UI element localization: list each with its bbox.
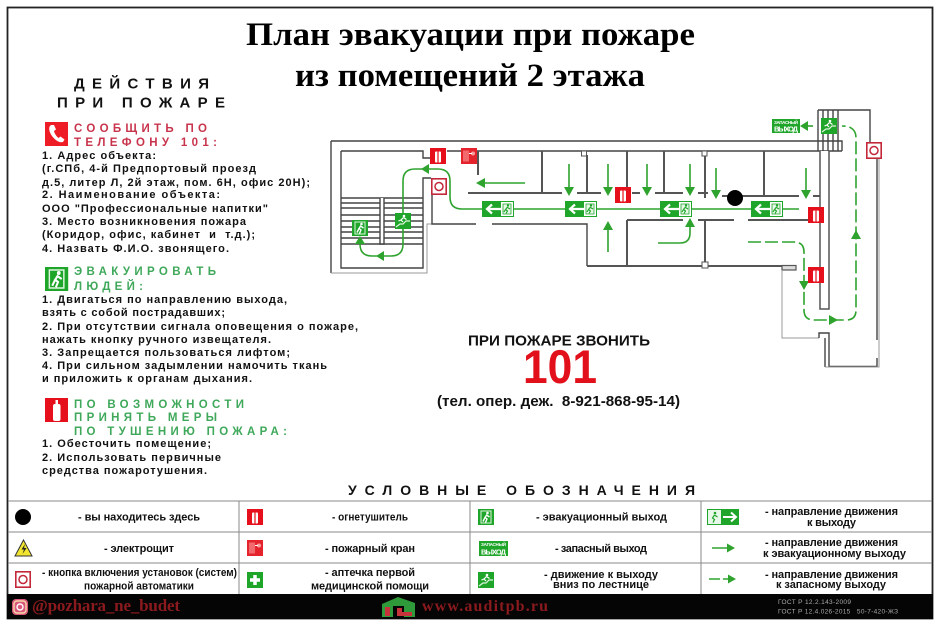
- spare exit sign: ЗАПАСНЫЙ: [774, 118, 798, 125]
- legend: spare exit: ЗАПАСНЫЙ: [481, 540, 506, 547]
- legend: stairs movement: вниз по лестнице: [553, 579, 649, 591]
- text: measures steps: [42, 438, 221, 477]
- website: www.auditpb.ru: [422, 598, 548, 615]
- text: evacuation steps: нажать кнопку ручного извещателя.: [42, 334, 271, 346]
- title: [246, 17, 695, 94]
- footer bar: [7, 594, 933, 619]
- legend: spare exit: ВЫХОД: [481, 548, 507, 556]
- you are here marker: [727, 190, 743, 206]
- text: evacuation steps: 4. При сильном задымлении намочить ткань: [42, 360, 327, 372]
- legend: fire hydrant: [247, 540, 415, 556]
- legend: stairs movement: - движение к выходу: [544, 569, 659, 581]
- fire safety equipment: [430, 143, 881, 283]
- legend: manual call button: пожарной автоматики: [84, 580, 194, 592]
- text: evacuation steps: 1. Двигаться по направлению выхода,: [42, 294, 287, 306]
- title: План эвакуации при пожаре: [246, 17, 695, 53]
- text: call steps: 3. Место возникновения пожара: [42, 216, 247, 228]
- legend: direction to exit: - направление движения: [765, 506, 898, 518]
- legend: direction to exit: [707, 506, 898, 529]
- heading: call: СООБЩИТЬ ПО: [74, 123, 207, 135]
- legend: electrical panel: [15, 540, 175, 556]
- exit signs: [352, 118, 837, 236]
- legend: first aid kit: - аптечка первой: [325, 567, 415, 579]
- legend: manual call button: [16, 567, 237, 592]
- heading: actions in case of fire: [57, 74, 225, 112]
- social handle: @pozhara_ne_budet: [32, 596, 180, 615]
- legend: extinguisher: [247, 509, 408, 525]
- text: call steps: (Коридор, офис, кабинет и т.д.);: [42, 229, 255, 241]
- text: call steps: (г.СПб, 4-й Предпортовый проезд: [42, 163, 256, 175]
- text: call steps: 4. Назвать Ф.И.О. звонящего.: [42, 243, 229, 255]
- legend: direction to spare exit: к запасному выходу: [776, 579, 887, 591]
- text: evacuation steps: взять с собой пострадавших;: [42, 307, 225, 319]
- legend: spare exit: [479, 540, 647, 556]
- text: measures steps: средства пожаротушения.: [42, 465, 207, 477]
- icon: fire telephone: [45, 122, 68, 146]
- floor plan: [331, 110, 881, 367]
- icon: running man: [45, 267, 68, 291]
- heading: measures: ПРИНЯТЬ МЕРЫ: [74, 412, 217, 424]
- evacuation route arrows: [355, 164, 811, 261]
- callout: call 101: [437, 332, 680, 410]
- legend: first aid kit: медицинской помощи: [311, 580, 429, 592]
- legend: direction to evacuation exit: к эвакуационному выходу: [763, 548, 907, 560]
- text: call steps: [42, 150, 310, 255]
- text: call steps: 2. Наименование объекта:: [42, 189, 220, 201]
- heading: measures: [74, 399, 287, 438]
- spare exit dashed route: [748, 121, 861, 325]
- heading: call: ТЕЛЕФОНУ 101:: [74, 137, 217, 149]
- logo: [382, 597, 415, 617]
- walls: [331, 110, 879, 367]
- heading: call: [74, 123, 217, 149]
- callout: call 101: ПРИ ПОЖАРЕ ЗВОНИТЬ: [468, 332, 650, 350]
- spare exit sign: ВЫХОД: [774, 124, 799, 134]
- spare exit sign: [772, 118, 800, 134]
- text: measures steps: 1. Обесточить помещение;: [42, 438, 211, 450]
- text: evacuation steps: 3. Запрещается пользоваться лифтом;: [42, 347, 290, 359]
- heading: evacuate: ЭВАКУИРОВАТЬ: [74, 266, 216, 278]
- legend: evacuation exit: - эвакуационный выход: [536, 512, 667, 524]
- text: call steps: 1. Адрес объекта:: [42, 150, 156, 162]
- legend: you are here: [15, 509, 200, 525]
- callout: call 101: (тел. опер. деж. 8-921-868-95-14): [437, 394, 680, 410]
- legend: spare exit: - запасный выход: [555, 543, 647, 555]
- heading: evacuate: ЛЮДЕЙ:: [74, 280, 143, 293]
- panel: call instructions: [42, 122, 310, 255]
- legend: extinguisher: - огнетушитель: [332, 512, 408, 524]
- heading: actions in case of fire: ПРИ ПОЖАРЕ: [57, 94, 225, 112]
- legend: direction to spare exit: - направление движения: [765, 569, 898, 581]
- text: evacuation steps: 2. При отсутствии сигнала оповещения о пожаре,: [42, 321, 358, 333]
- text: evacuation steps: [42, 294, 358, 385]
- heading: evacuate: [74, 266, 216, 293]
- icon: instagram: [12, 599, 28, 615]
- standards text: ГОСТ Р 12.4.026-2015 50-7-420-ЖЗ: [778, 608, 898, 616]
- table grid: [8, 501, 932, 594]
- legend: direction to evacuation exit: [712, 537, 907, 560]
- heading: measures: ПО ТУШЕНИЮ ПОЖАРА:: [74, 426, 287, 438]
- standards text: [778, 599, 898, 616]
- legend: you are here: - вы находитесь здесь: [78, 512, 200, 524]
- text: call steps: д.5, литер Л, 2й этаж, пом. 6Н, офис 20Н);: [42, 177, 310, 189]
- legend: fire hydrant: - пожарный кран: [325, 543, 415, 555]
- text: measures steps: 2. Использовать первичные: [42, 452, 221, 464]
- heading: actions in case of fire: ДЕЙСТВИЯ: [74, 74, 209, 92]
- legend: manual call button: - кнопка включения установок (систем): [42, 567, 237, 579]
- text: call steps: ООО "Профессиональные напитки": [42, 203, 268, 215]
- legend: direction to evacuation exit: - направление движения: [765, 537, 898, 549]
- standards text: ГОСТ Р 12.2.143-2009: [778, 599, 851, 606]
- legend: stairs movement: [478, 569, 659, 591]
- callout: call 101: 101: [523, 340, 597, 393]
- panel: firefighting measures: [42, 398, 287, 477]
- icon: extinguisher: [45, 398, 68, 422]
- panel: evacuate people: [42, 266, 358, 385]
- legend: electrical panel: - электрощит: [104, 543, 175, 555]
- legend: direction to spare exit: [709, 569, 898, 591]
- legend: first aid kit: [247, 567, 429, 592]
- heading: measures: ПО ВОЗМОЖНОСТИ: [74, 399, 244, 411]
- legend: direction to exit: к выходу: [807, 517, 857, 529]
- legend: evacuation exit: [478, 509, 667, 525]
- legend table: [8, 501, 932, 594]
- legend heading: УСЛОВНЫЕ ОБОЗНАЧЕНИЯ: [348, 482, 695, 498]
- title: из помещений 2 этажа: [295, 58, 645, 94]
- text: evacuation steps: и приложить к органам дыхания.: [42, 373, 252, 385]
